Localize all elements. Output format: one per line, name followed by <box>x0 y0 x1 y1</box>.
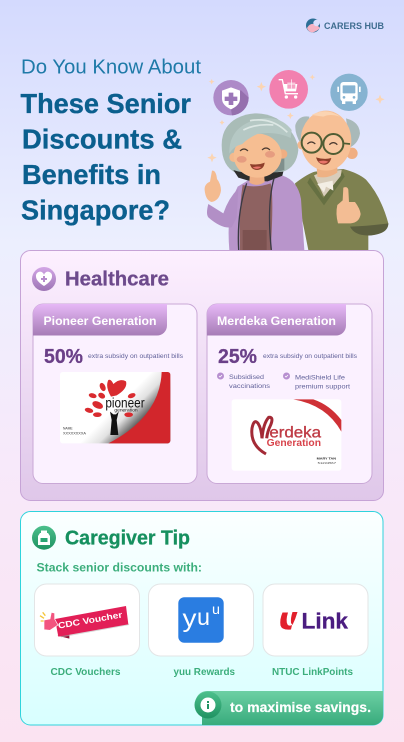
stat description: extra subsidy on outpatient bills <box>88 353 183 360</box>
option: yuu Rewards: u <box>212 601 220 617</box>
title: These Senior <box>20 88 191 119</box>
option: NTUC LinkPoints: Link <box>302 608 349 633</box>
callout: to maximise savings: to maximise savings. <box>230 699 371 715</box>
option: NTUC LinkPoints: NTUC LinkPoints <box>272 667 353 678</box>
title <box>20 56 201 225</box>
option: yuu Rewards: y <box>182 605 197 633</box>
option: CDC Vouchers <box>34 584 140 678</box>
subheading: Stack senior discounts with: <box>36 560 202 574</box>
man <box>295 111 388 250</box>
option: yuu Rewards: yuu Rewards <box>174 667 235 678</box>
icon: healthcare shield <box>213 80 249 115</box>
card: Pioneer Generation <box>33 304 197 484</box>
card header <box>207 304 346 336</box>
benefit: subsidised vaccinations: vaccinations <box>229 383 271 390</box>
panel: caregiver tip <box>20 512 383 725</box>
benefit: subsidised vaccinations: Subsidised <box>229 374 264 381</box>
title: Discounts & <box>22 124 182 155</box>
logo: Carers Hub: CARERS HUB <box>324 21 384 31</box>
stat description: extra subsidy on outpatient bills <box>263 353 357 360</box>
image: Merdeka Generation card: Generation <box>267 438 321 449</box>
title: Singapore? <box>21 194 170 225</box>
option: yuu Rewards <box>148 584 254 678</box>
card: Merdeka Generation <box>207 304 372 484</box>
illustration: seniors with benefit icons <box>205 70 388 250</box>
benefit: MediShield Life premium support <box>283 372 350 390</box>
icon: shopping bag <box>32 526 56 550</box>
benefit: subsidised vaccinations <box>217 372 271 390</box>
option: CDC Vouchers: CDC Vouchers <box>50 667 121 678</box>
image: Pioneer Generation card: XXXXXXXXA <box>63 432 87 436</box>
heading: Caregiver Tip: Caregiver Tip <box>65 528 190 550</box>
card header <box>33 304 167 336</box>
card title: Merdeka Generation <box>217 314 336 328</box>
option: yuu Rewards: u <box>197 604 210 630</box>
option: NTUC LinkPoints <box>263 584 368 678</box>
woman <box>205 113 304 250</box>
icon: bus <box>330 74 368 111</box>
stat: 50%: 50% <box>44 346 83 368</box>
panel: healthcare <box>20 250 384 500</box>
image: Pioneer Generation card: generation <box>114 407 138 412</box>
image: Pioneer Generation card: pioneer <box>105 394 145 410</box>
title: Do You Know About <box>21 56 201 78</box>
callout: to maximise savings <box>194 691 383 725</box>
benefit: MediShield Life premium support: premium support <box>295 384 350 390</box>
image: Pioneer Generation card <box>60 372 170 443</box>
image: Pioneer Generation card: NAME <box>63 426 73 430</box>
card title: Pioneer Generation <box>44 314 156 328</box>
stat: 25%: 25% <box>218 346 257 368</box>
icon: shopping cart <box>269 70 308 109</box>
icon: info <box>194 692 222 718</box>
logo: Carers Hub <box>306 18 384 32</box>
benefit: MediShield Life premium support: MediShield Life <box>295 374 345 382</box>
image: Merdeka Generation card: 51234567 <box>318 461 336 465</box>
heading: Healthcare: Healthcare <box>65 269 169 291</box>
image: Merdeka Generation card: MARY TAN <box>317 456 336 460</box>
title: Benefits in <box>22 159 161 190</box>
image: Merdeka Generation card <box>232 399 341 471</box>
option: CDC Vouchers: CDC Voucher <box>57 609 124 631</box>
icon: heart <box>32 267 56 291</box>
image: Merdeka Generation card: erdeka <box>269 424 322 441</box>
sparkles <box>207 74 385 162</box>
